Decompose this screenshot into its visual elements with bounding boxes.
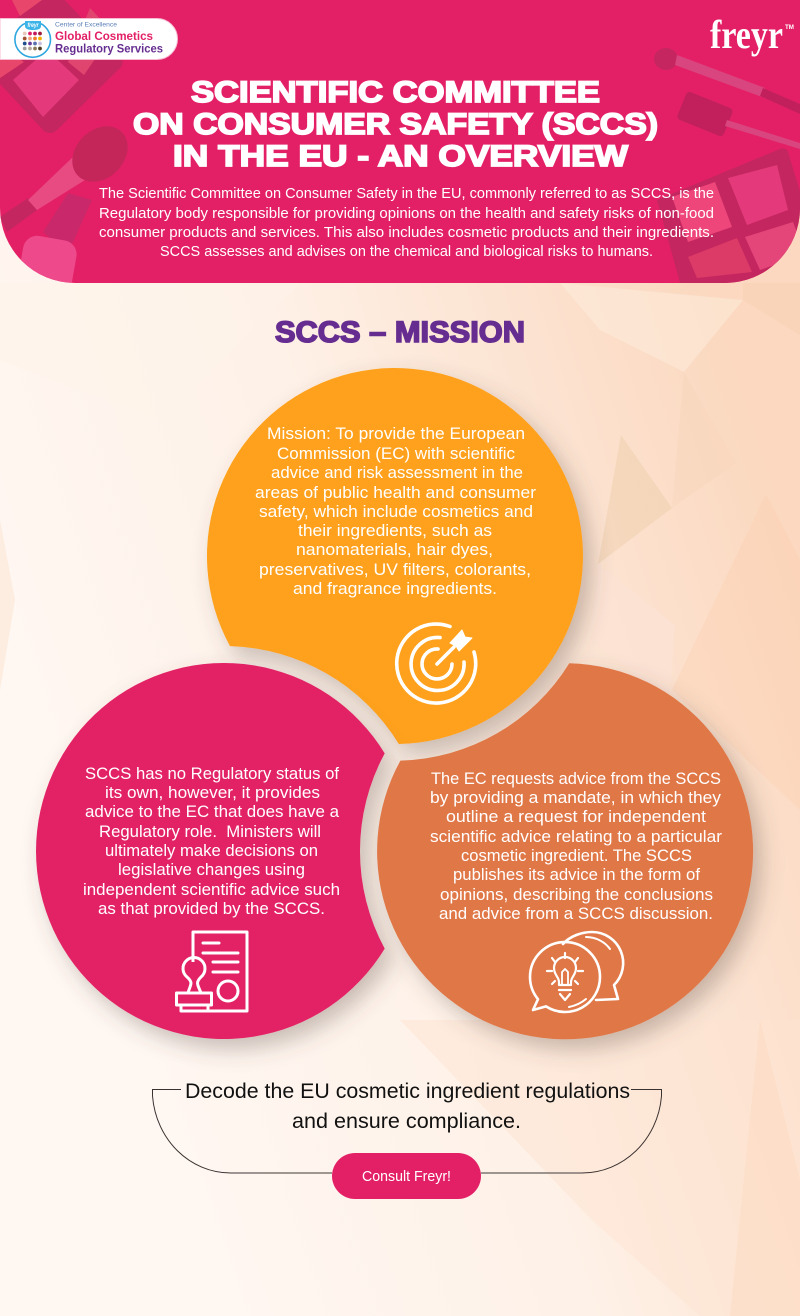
title: IN THE EU - AN OVERVIEW bbox=[173, 140, 629, 173]
title: SCIENTIFIC COMMITTEE bbox=[191, 76, 600, 109]
icon: makeup brush left bbox=[0, 126, 128, 232]
regulatory status text: ultimately make decisions on bbox=[105, 842, 318, 860]
bracket frame bbox=[152, 1090, 662, 1173]
icon: nail polish bbox=[21, 193, 92, 283]
panel: mission circle bbox=[207, 368, 583, 744]
mission text bbox=[255, 425, 537, 598]
callout text: Decode the EU cosmetic ingredient regulations bbox=[185, 1080, 630, 1103]
icon: speech bubbles with light bulb bbox=[530, 932, 623, 1012]
logo: Global Cosmetics Regulatory Services badge: Regulatory Services bbox=[55, 44, 163, 56]
icon: brush top right bbox=[654, 48, 800, 114]
intro text: SCCS assesses and advises on the chemical and biological risks to humans. bbox=[160, 244, 653, 260]
mission text: advice and risk assessment in the bbox=[271, 464, 523, 482]
mandate text: outline a request for independent bbox=[446, 808, 706, 826]
mandate text: and advice from a SCCS discussion. bbox=[439, 905, 713, 923]
icon: palette bottom right bbox=[657, 148, 800, 290]
icon: document and stamp bbox=[176, 932, 247, 1011]
title bbox=[133, 76, 658, 173]
header banner bbox=[0, 0, 800, 302]
mission text: safety, which include cosmetics and bbox=[259, 503, 533, 521]
mission text: Commission (EC) with scientific bbox=[277, 445, 515, 463]
mission text: nanomaterials, hair dyes, bbox=[296, 541, 493, 559]
regulatory status text: as that provided by the SCCS. bbox=[98, 900, 325, 918]
logo: Global Cosmetics Regulatory Services badge: Center of Excellence bbox=[55, 22, 118, 28]
mandate text bbox=[430, 770, 723, 923]
logo: freyr: freyr bbox=[710, 12, 783, 57]
regulatory status text bbox=[83, 765, 340, 918]
mission text: areas of public health and consumer bbox=[255, 484, 537, 502]
panel: regulatory status circle bbox=[36, 663, 385, 1039]
mission text: and fragrance ingredients. bbox=[293, 580, 497, 598]
mission text: preservatives, UV filters, colorants, bbox=[259, 561, 531, 579]
mandate text: opinions, describing the conclusions bbox=[440, 886, 713, 904]
logo: freyr: TM bbox=[785, 25, 794, 31]
panel: mandate circle bbox=[377, 663, 753, 1039]
icon: target with arrow bbox=[397, 624, 476, 703]
intro text: Regulatory body responsible for providing opinions on the health and safety risks of non-food bbox=[99, 206, 714, 222]
intro text bbox=[99, 186, 714, 260]
callout text: and ensure compliance. bbox=[292, 1110, 521, 1133]
regulatory status text: its own, however, it provides bbox=[105, 784, 320, 802]
button: consult freyr: Consult Freyr! bbox=[362, 1168, 451, 1185]
regulatory status text: Regulatory role. Ministers will bbox=[99, 823, 321, 841]
mandate text: by providing a mandate, in which they bbox=[430, 789, 722, 807]
mandate text: cosmetic ingredient. The SCCS bbox=[461, 847, 692, 865]
callout: decode regulations bbox=[152, 1080, 662, 1199]
callout text bbox=[185, 1080, 630, 1133]
intro text: The Scientific Committee on Consumer Safety in the EU, commonly referred to as SCCS, is the bbox=[99, 186, 714, 202]
intro text: consumer products and services. This also includes cosmetic products and their ingredients. bbox=[99, 225, 714, 241]
title: ON CONSUMER SAFETY (SCCS) bbox=[133, 108, 658, 141]
regulatory status text: legislative changes using bbox=[118, 861, 305, 879]
mission text: Mission: To provide the European bbox=[267, 425, 525, 443]
logo: Global Cosmetics Regulatory Services badge: freyr bbox=[28, 23, 39, 29]
logo: Global Cosmetics Regulatory Services badge bbox=[0, 18, 177, 60]
icon: palette top left bbox=[0, 0, 123, 133]
regulatory status text: advice to the EC that does have a bbox=[85, 803, 340, 821]
mission text: their ingredients, such as bbox=[298, 522, 492, 540]
mandate text: publishes its advice in the form of bbox=[453, 866, 700, 884]
regulatory status text: independent scientific advice such bbox=[83, 881, 340, 899]
mandate text: scientific advice relating to a particular bbox=[430, 828, 723, 846]
icon: spoolie brush bbox=[676, 91, 800, 149]
heading: SCCS mission: SCCS – MISSION bbox=[275, 316, 525, 349]
regulatory status text: SCCS has no Regulatory status of bbox=[85, 765, 339, 783]
mandate text: The EC requests advice from the SCCS bbox=[431, 770, 721, 788]
logo: Global Cosmetics Regulatory Services badge: Global Cosmetics bbox=[55, 31, 153, 43]
button: consult freyr bbox=[332, 1153, 481, 1199]
